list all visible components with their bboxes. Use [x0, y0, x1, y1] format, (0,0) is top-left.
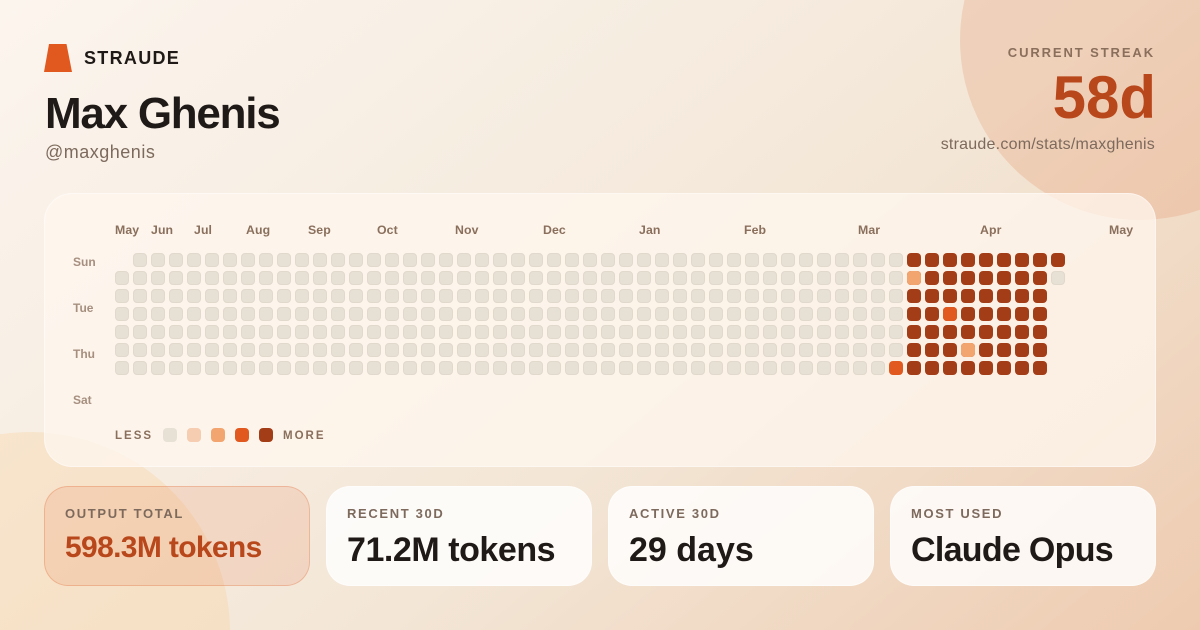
card label: ACTIVE 30D	[629, 506, 721, 521]
streak value: 58d	[1053, 64, 1156, 131]
streak block	[941, 45, 1156, 153]
brand name: STRAUDE	[84, 48, 180, 68]
month labels: Feb	[744, 223, 766, 237]
month labels: Jan	[639, 223, 660, 237]
weekday labels: Tue	[73, 301, 94, 315]
empty cells	[115, 253, 1065, 375]
card: recent 30d	[326, 486, 592, 586]
weekday labels	[73, 255, 96, 407]
card: output total	[44, 486, 310, 586]
card value: 29 days	[629, 531, 754, 569]
card label: MOST USED	[911, 506, 1003, 521]
user handle: @maxghenis	[45, 142, 155, 162]
weekday labels: Sun	[73, 255, 96, 269]
month labels: Jul	[194, 223, 212, 237]
card label: RECENT 30D	[347, 506, 444, 521]
month labels: Mar	[858, 223, 880, 237]
user name: Max Ghenis	[45, 89, 279, 138]
accent cells	[889, 271, 975, 375]
active cells	[907, 253, 1065, 375]
weekday labels: Thu	[73, 347, 95, 361]
card: most used	[890, 486, 1156, 586]
card value: 598.3M tokens	[65, 531, 262, 564]
chart: activity heatmap grid	[73, 223, 1133, 442]
month labels	[115, 223, 1133, 237]
card: active 30d	[608, 486, 874, 586]
card value: 71.2M tokens	[347, 531, 555, 569]
logo mark	[44, 44, 72, 72]
month labels: Aug	[246, 223, 270, 237]
month labels: Nov	[455, 223, 479, 237]
legend: LESS	[115, 430, 153, 442]
month labels: Dec	[543, 223, 566, 237]
profile url: straude.com/stats/maxghenis	[941, 136, 1155, 153]
card label: OUTPUT TOTAL	[65, 506, 184, 521]
card value: Claude Opus	[911, 531, 1113, 569]
legend: MORE	[283, 430, 326, 442]
panel: activity heatmap	[44, 193, 1156, 467]
month labels: Sep	[308, 223, 331, 237]
month labels: Apr	[980, 223, 1002, 237]
month labels: May	[1109, 223, 1133, 237]
month labels: May	[115, 223, 139, 237]
month labels: Jun	[151, 223, 173, 237]
streak label: CURRENT STREAK	[1008, 45, 1155, 60]
month labels: Oct	[377, 223, 398, 237]
weekday labels: Sat	[73, 393, 92, 407]
legend	[115, 428, 326, 442]
